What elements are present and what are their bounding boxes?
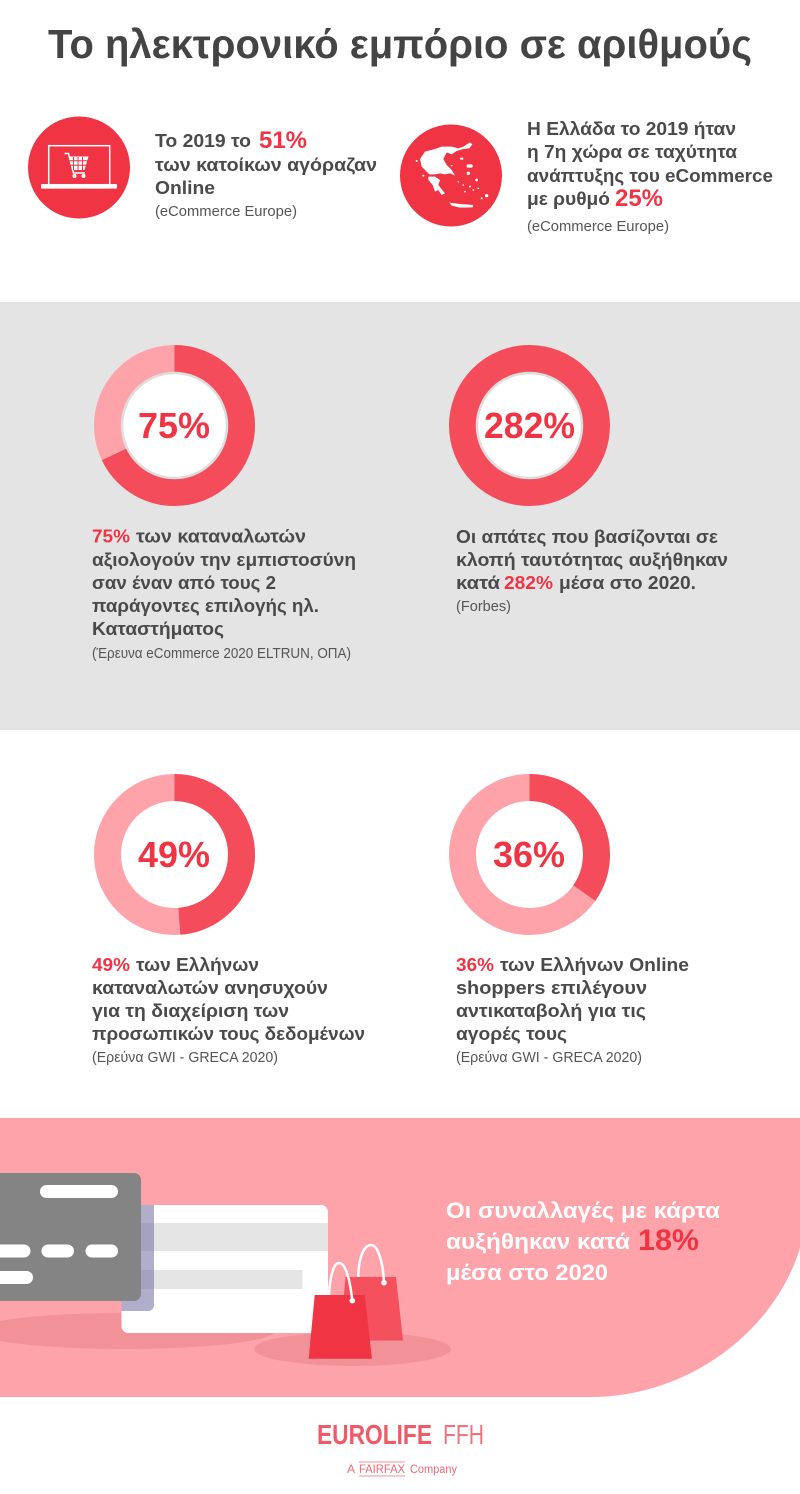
text: identity fraud stat: κατά xyxy=(456,573,500,593)
stat text: 25%: (eCommerce Europe) xyxy=(527,219,669,235)
illustration: credit cards and shopping bags xyxy=(0,1173,451,1366)
text: data handling stat: για τη διαχείριση των xyxy=(92,1001,289,1021)
text: cash on delivery stat xyxy=(456,955,689,1066)
panel: grey band with trust and fraud stats xyxy=(0,302,800,730)
stat text: 51% xyxy=(155,127,377,220)
text: cash on delivery stat: των Ελλήνων Online xyxy=(500,955,689,975)
panel: card transactions banner xyxy=(0,1118,800,1397)
stat text: 51%: των κατοίκων αγόραζαν xyxy=(155,155,377,176)
stat text: 25%: με ρυθμό xyxy=(527,189,610,209)
donut chart: 282%: 282% xyxy=(484,405,575,446)
text: data handling stat: προσωπικών τους δεδομένων xyxy=(92,1024,365,1044)
text: identity fraud stat: μέσα στο 2020. xyxy=(559,573,696,593)
text: cash on delivery stat: (Ερεύνα GWI - GRECA 2020) xyxy=(456,1050,642,1066)
stat text: 51%: Το 2019 το xyxy=(155,131,251,151)
panel: Greek consumer stats xyxy=(92,788,689,1066)
text: data handling stat: (Ερεύνα GWI - GRECA 2020) xyxy=(92,1050,278,1066)
text: trust stat: των καταναλωτών xyxy=(136,526,306,546)
donut chart: 49%: 49% xyxy=(138,834,210,875)
stat text: 51%: (eCommerce Europe) xyxy=(155,204,297,220)
donut chart: 282% xyxy=(462,358,596,492)
text: 18% card transactions: 18% xyxy=(638,1224,699,1257)
text: cash on delivery stat: 36% xyxy=(456,955,494,975)
stat text: 25%: ανάπτυξης του eCommerce xyxy=(527,166,773,187)
text: identity fraud stat: κλοπή ταυτότητας αυξήθηκαν xyxy=(456,550,728,571)
text: trust stat xyxy=(92,526,356,662)
text: cash on delivery stat: αντικαταβολή για τις xyxy=(456,1001,646,1021)
text: cash on delivery stat: shoppers επιλέγουν xyxy=(456,978,647,998)
stat text: 51%: 51% xyxy=(259,127,307,154)
text: trust stat: (Έρευνα eCommerce 2020 ELTRUN, ΟΠΑ) xyxy=(92,646,351,662)
text: identity fraud stat: 282% xyxy=(504,573,553,593)
logo: Eurolife FFH: Company xyxy=(410,1462,457,1476)
text: trust stat: Καταστήματος xyxy=(92,619,224,639)
text: identity fraud stat xyxy=(456,527,728,615)
text: trust stat: παράγοντες επιλογής ηλ. xyxy=(92,596,319,616)
panel: 2019 online shoppers stat xyxy=(28,116,377,220)
logo: Eurolife FFH: A xyxy=(347,1462,355,1476)
text: trust stat: σαν έναν από τους 2 xyxy=(92,573,276,593)
logo: Eurolife FFH xyxy=(317,1419,484,1476)
donut chart: 36%: 36% xyxy=(493,834,565,875)
text: data handling stat: των Ελλήνων xyxy=(136,955,259,975)
text: trust stat: αξιολογούν την εμπιστοσύνη xyxy=(92,550,356,571)
text: 18% card transactions: Οι συναλλαγές με κάρτα xyxy=(446,1198,721,1223)
text: cash on delivery stat: αγορές τους xyxy=(456,1024,567,1044)
logo: Eurolife FFH: FAIRFAX xyxy=(359,1462,405,1476)
title: Το ηλεκτρονικό εμπόριο σε αριθμούς xyxy=(48,21,752,67)
stat text: 25%: 25% xyxy=(615,185,663,212)
icon: map of Greece xyxy=(400,124,502,226)
logo: Eurolife FFH: EUROLIFE xyxy=(317,1419,432,1450)
text: 18% card transactions xyxy=(446,1198,721,1285)
text: identity fraud stat: Οι απάτες που βασίζονται σε xyxy=(456,527,718,548)
text: identity fraud stat: (Forbes) xyxy=(456,599,511,615)
text: 18% card transactions: μέσα στο 2020 xyxy=(446,1260,608,1285)
stat text: 51%: Online xyxy=(155,178,215,198)
panel: Greece growth stat xyxy=(400,119,773,235)
stat text: 25%: η 7η χώρα σε ταχύτητα xyxy=(527,142,737,162)
text: data handling stat: 49% xyxy=(92,955,130,975)
text: trust stat: 75% xyxy=(92,526,130,546)
logo: Eurolife FFH: FFH xyxy=(443,1419,484,1450)
stat text: 25% xyxy=(527,119,773,235)
donut chart: 36% xyxy=(462,788,596,922)
icon: laptop with shopping cart xyxy=(28,116,130,218)
text: data handling stat xyxy=(92,955,365,1066)
stat text: 25%: Η Ελλάδα το 2019 ήταν xyxy=(527,119,736,139)
text: 18% card transactions: αυξήθηκαν κατά xyxy=(446,1229,631,1254)
donut chart: 75%: 75% xyxy=(138,405,210,446)
donut chart: 49% xyxy=(108,788,242,922)
donut chart: 75% xyxy=(108,358,242,492)
text: data handling stat: καταναλωτών ανησυχούν xyxy=(92,978,328,998)
